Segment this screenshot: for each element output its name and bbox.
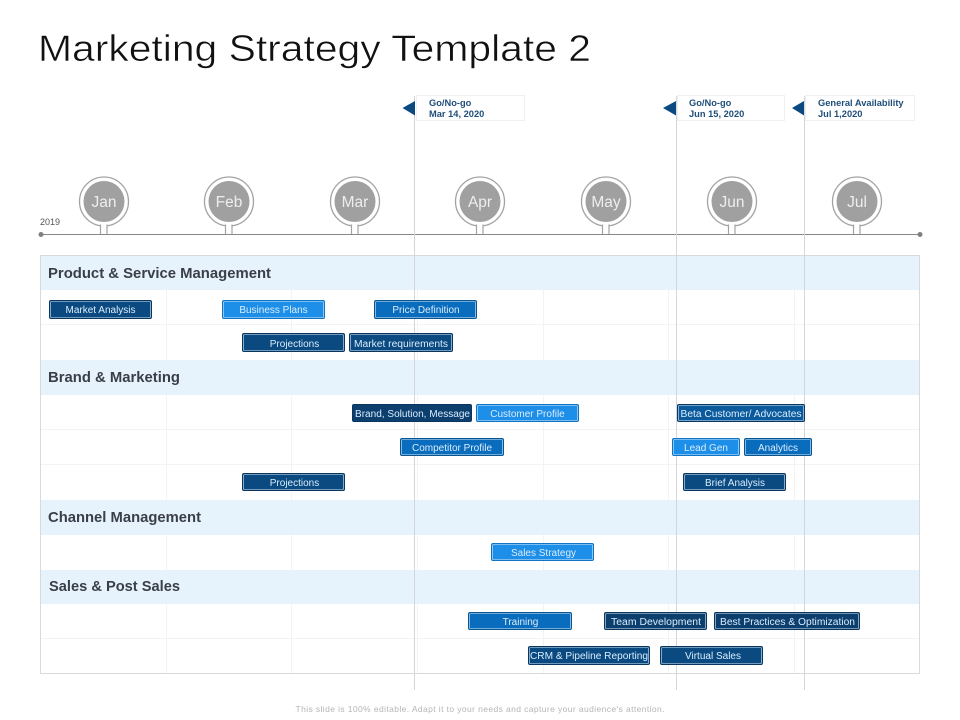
month: Apr	[456, 177, 504, 234]
bar: Team Development	[604, 612, 706, 630]
bar: Market requirements: Market requirements	[354, 339, 448, 350]
month: Feb: Feb	[216, 194, 242, 211]
bar: CRM & Pipeline Reporting: CRM & Pipeline Reporting	[530, 651, 648, 662]
bar: Projections	[242, 334, 344, 352]
milestone: General Availability	[792, 96, 914, 120]
bar: Market requirements	[350, 334, 452, 352]
bar: Beta Customer/ Advocates: Beta Customer/ Advocates	[680, 409, 802, 420]
bar: Best Practices & Optimization: Best Practices & Optimization	[720, 617, 855, 628]
milestone: Go/No-go Mar 14: Mar 14, 2020	[429, 109, 484, 119]
month: Mar: Mar	[342, 194, 368, 211]
bar: Projections 2	[242, 474, 344, 490]
bar: Customer Profile	[476, 404, 578, 422]
roadmap table	[40, 256, 920, 674]
bar: Virtual Sales	[660, 646, 762, 664]
footer note: This slide is 100% editable. Adapt it to your needs and capture your audience's attention.	[296, 704, 664, 714]
section: Product & Service Management	[41, 256, 919, 290]
bar: Analytics: Analytics	[758, 443, 798, 454]
bar: Lead Gen: Lead Gen	[684, 443, 728, 454]
month: May: May	[591, 194, 621, 211]
bar: Competitor Profile	[400, 438, 504, 456]
bar: Training: Training	[503, 617, 538, 628]
month: Mar	[330, 177, 380, 234]
bar: Market Analysis: Market Analysis	[65, 305, 136, 316]
bar: Business Plans	[222, 300, 324, 318]
bar: CRM & Pipeline Reporting	[528, 646, 650, 664]
bar: Projections 2: Projections	[270, 478, 319, 489]
bar: Customer Profile: Customer Profile	[490, 409, 565, 420]
bar: Sales Strategy: Sales Strategy	[511, 548, 576, 559]
month: May	[582, 177, 630, 234]
timeline	[38, 177, 922, 237]
title: Marketing Strategy Template 2	[38, 27, 591, 69]
bar: Market Analysis	[50, 300, 152, 318]
section: Channel Management	[41, 500, 919, 535]
milestone lines	[414, 96, 804, 690]
bar: Best Practices & Optimization	[714, 612, 860, 630]
month: Jul	[832, 177, 882, 234]
milestone: Go/No-go Mar 14: Go/No-go	[429, 98, 472, 108]
bar: Competitor Profile: Competitor Profile	[412, 443, 492, 454]
section: Sales & Post Sales	[41, 570, 919, 604]
milestone: Go/No-go Jun 15: Go/No-go	[689, 98, 732, 108]
bar: Sales Strategy	[492, 544, 594, 560]
month: Jan	[80, 177, 128, 234]
bar: Price Definition: Price Definition	[392, 305, 460, 316]
bar: Price Definition	[374, 300, 476, 318]
bar: Team Development: Team Development	[611, 617, 701, 628]
milestone: General Availability: General Availability	[818, 98, 904, 108]
milestone: Go/No-go Mar 14	[402, 96, 524, 120]
month: Jan: Jan	[92, 194, 116, 211]
section: Product & Service Management: Product & Service Management	[48, 265, 271, 282]
bar: Projections: Projections	[270, 339, 319, 350]
bar: Virtual Sales: Virtual Sales	[685, 651, 741, 662]
milestone: General Availability: Jul 1,2020	[818, 109, 862, 119]
milestone: Go/No-go Jun 15: Jun 15, 2020	[689, 109, 744, 119]
month: Feb	[204, 177, 254, 234]
bar: Brand, Solution, Message	[352, 404, 472, 422]
month: Apr: Apr	[468, 194, 492, 211]
month: Jun: Jun	[720, 194, 744, 211]
month: Jul: Jul	[847, 194, 867, 211]
bar: Beta Customer/ Advocates	[678, 404, 804, 422]
section: Sales & Post Sales: Sales & Post Sales	[49, 578, 180, 595]
bar: Brief Analysis: Brief Analysis	[705, 478, 765, 489]
milestone: Go/No-go Jun 15	[663, 96, 784, 120]
bar: Training	[468, 612, 572, 630]
month: Jun	[708, 177, 756, 234]
section: Channel Management: Channel Management	[48, 509, 201, 526]
year label: 2019	[40, 217, 60, 227]
bar: Lead Gen	[672, 438, 740, 456]
section: Brand & Marketing	[41, 360, 919, 395]
bar: Business Plans: Business Plans	[239, 305, 308, 316]
section: Brand & Marketing: Brand & Marketing	[48, 369, 180, 386]
bar: Brief Analysis	[684, 474, 786, 490]
bar: Analytics	[744, 438, 812, 456]
bar: Brand, Solution, Message: Brand, Solution, Message	[355, 409, 470, 420]
